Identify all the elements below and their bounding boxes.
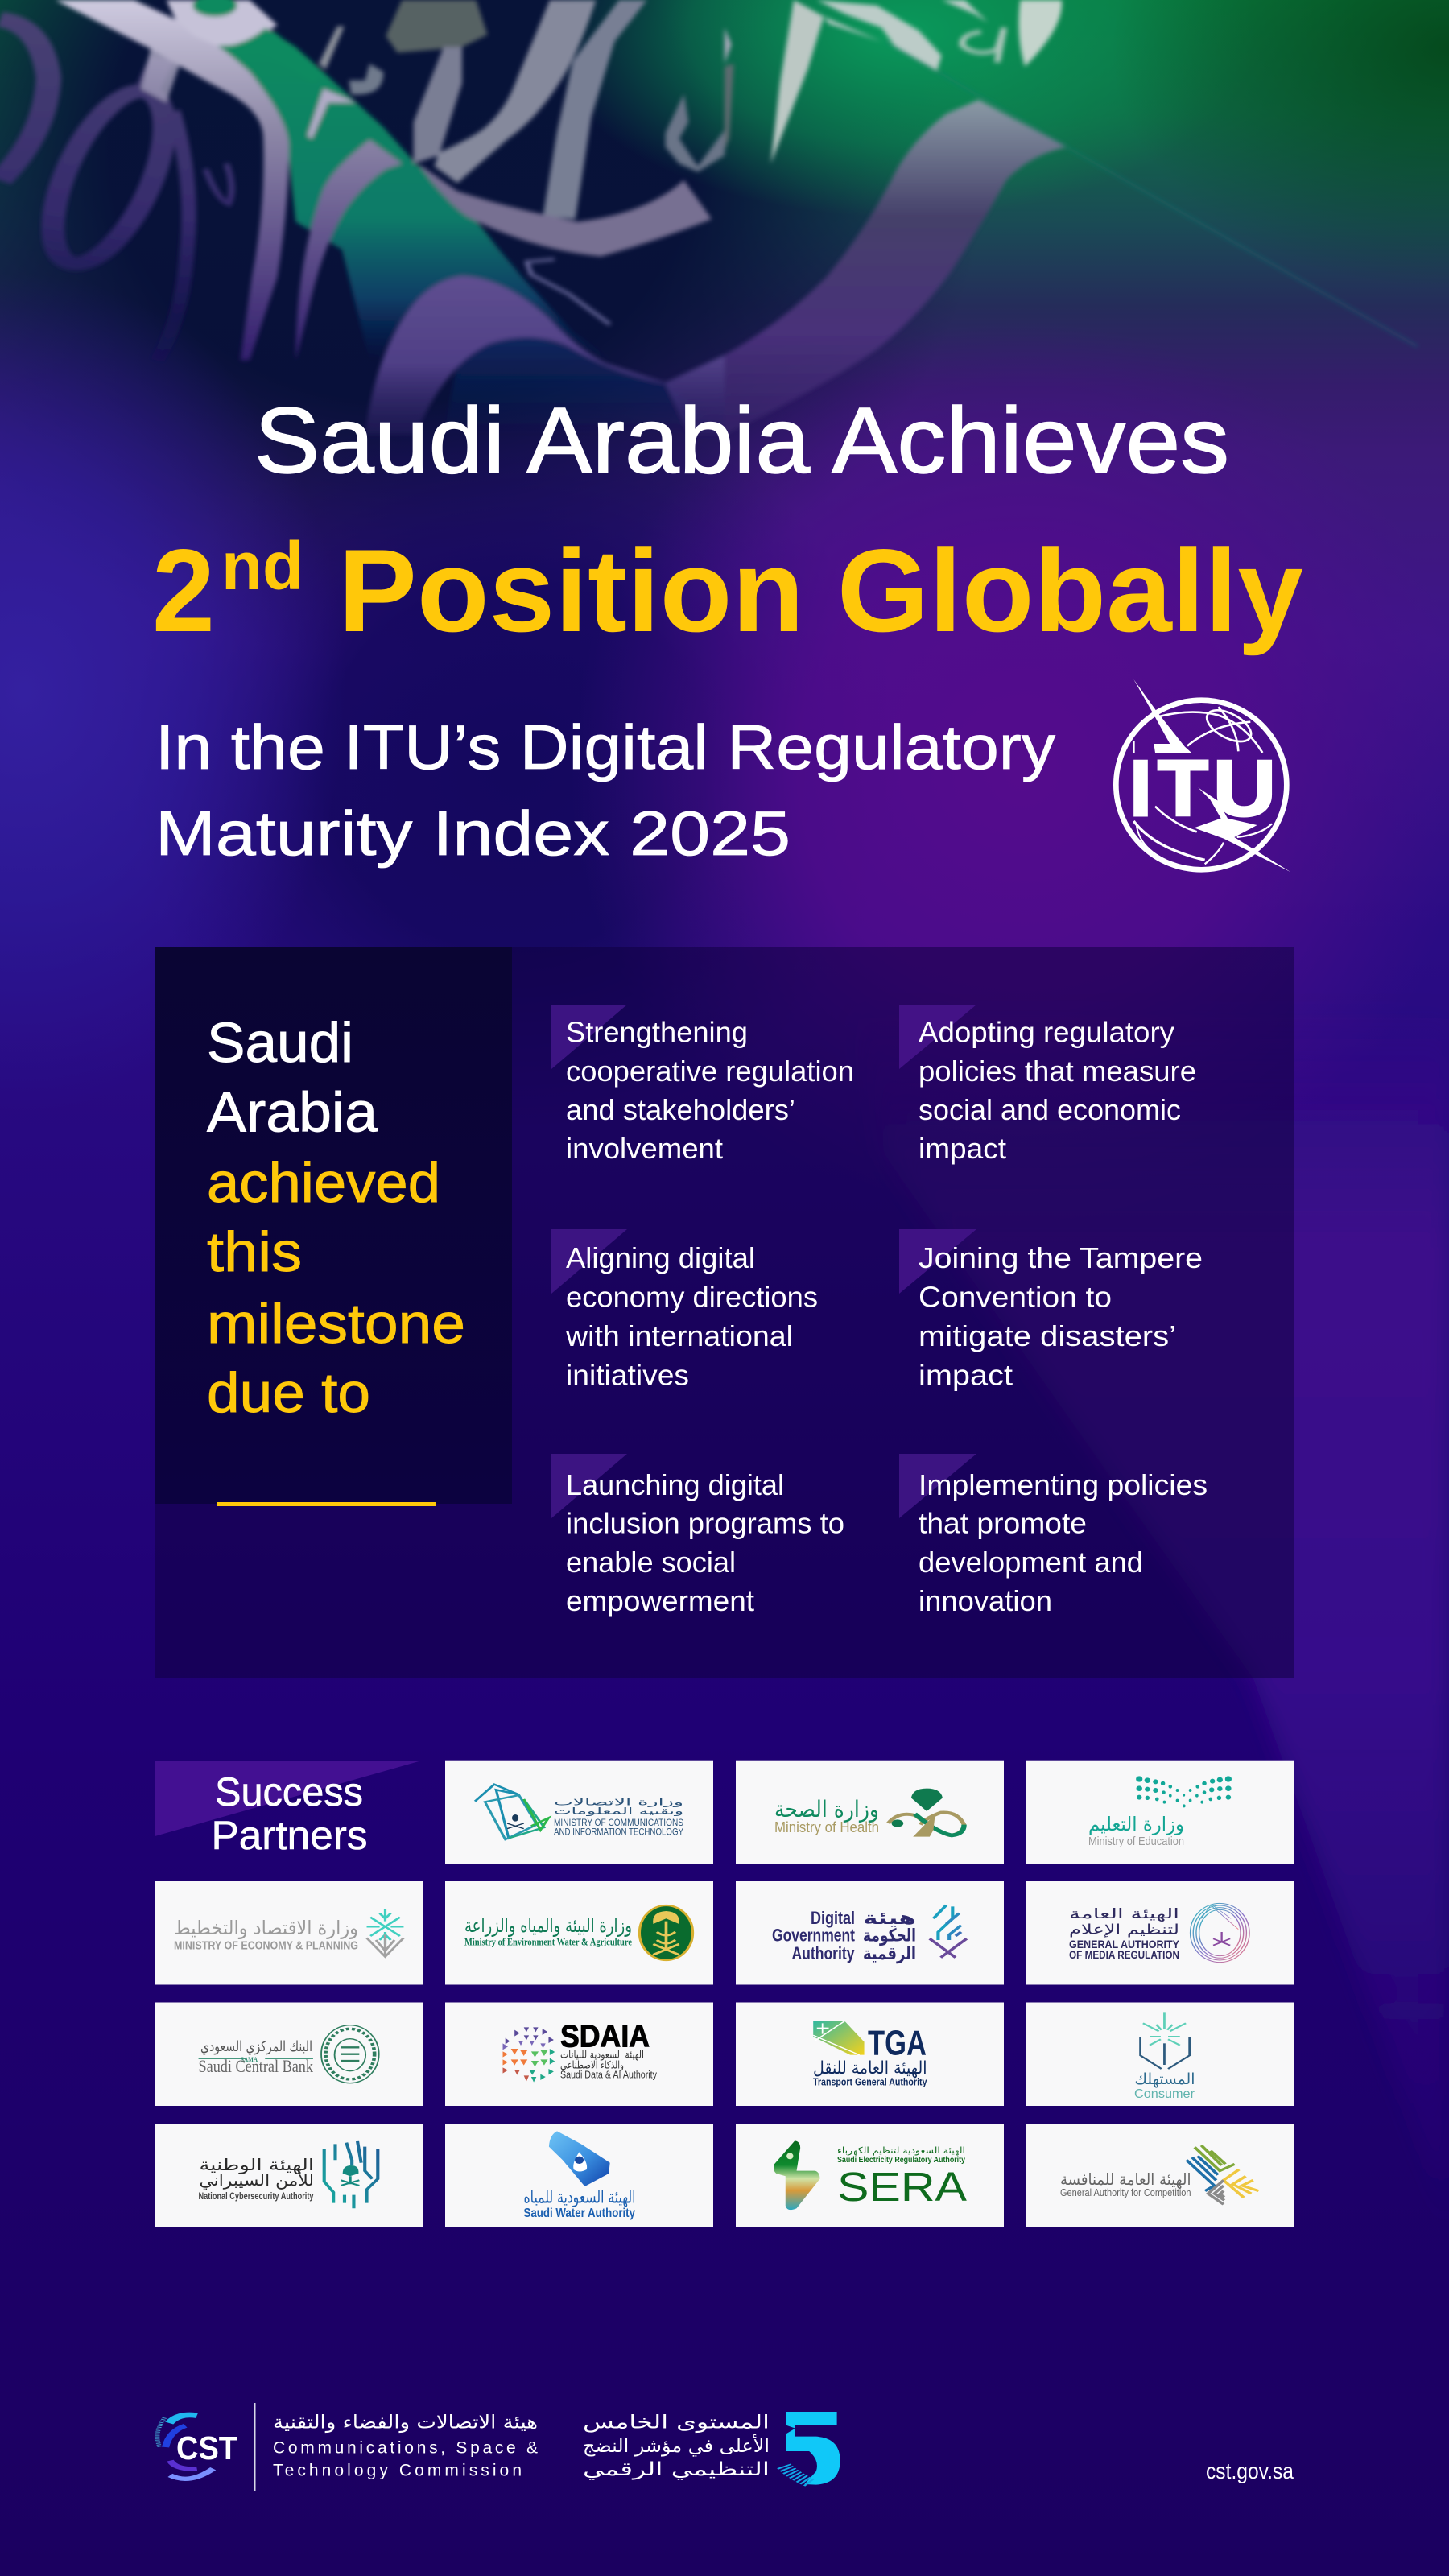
card: Digital Government Authority [736,1881,1004,1985]
card: Digital Government Authority: Authority [792,1943,855,1963]
card: General Authority of Media Regulation: لتنظيم الإعلام [1069,1922,1179,1938]
card: Saudi Water Authority [445,2124,713,2227]
item: joining the Tampere Convention: mitigate disasters’ [919,1319,1176,1352]
card: Ministry of Environment Water and Agriculture: Ministry of Environment Water & Agriculture [464,1935,632,1948]
card: Ministry of Environment Water and Agriculture: وزارة البيئة والمياه والزراعة [464,1914,632,1937]
item: aligning digital economy [551,1229,818,1391]
card: Ministry of Education: Ministry of Education [1088,1835,1184,1848]
card: Saudi Water Authority: الهيئة السعودية للمياه [523,2188,636,2207]
item: implementing policies: that promote [919,1507,1087,1539]
heading: achieved this milestone due to: due to [207,1361,370,1424]
card: Saudi Central Bank [155,2003,423,2106]
card: SDAIA: Saudi Data & AI Authority [560,2069,657,2080]
card: SDAIA [445,2003,713,2106]
card: SDAIA: والذكاء الاصطناعي [560,2059,624,2072]
item: joining the Tampere Convention: impact [919,1359,1013,1391]
CST name text: هيئة الاتصالات والفضاء والتقنية [273,2412,538,2433]
card: Saudi Central Bank: SAMA [241,2056,258,2063]
card: General Authority for Competition [1026,2124,1294,2227]
item: adopting regulatory policies: Adopting regulatory [919,1016,1174,1048]
item: implementing policies: Implementing policies [919,1468,1208,1501]
heading: Saudi Arabia: Saudi [207,1011,353,1074]
panel: reasons [155,947,1294,1678]
icon: ITU logo: U [1213,744,1276,832]
item: strengthening cooperative regulation [551,1005,854,1165]
card: Transport General Authority: Transport General Authority [813,2075,927,2088]
card: General Authority of Media Regulation: الهيئة العامة [1069,1906,1179,1922]
icon: ITU logo [1116,679,1290,872]
item: adopting regulatory policies: social and economic [919,1093,1181,1126]
subtitle: Maturity Index 2025 [155,798,791,869]
card: Saudi Water Authority: Saudi Water Authority [523,2207,635,2220]
title line 2: 2nd position globally: nd [221,528,303,604]
card: Digital Government Authority: Government [772,1926,856,1945]
heading: achieved this milestone due to: milestone [207,1292,465,1355]
item: joining the Tampere Convention [899,1229,1203,1391]
item: aligning digital economy: economy directions [566,1280,818,1314]
item: adopting regulatory policies: impact [919,1132,1006,1165]
item: adopting regulatory policies [899,1005,1196,1165]
card: Ministry of Health: Ministry of Health [774,1819,879,1835]
icon: ITU logo: I [1129,744,1152,832]
card: Saudi Electricity Regulatory Authority: SERA [837,2164,967,2210]
card: Ministry of Communications and Information Technology [445,1761,713,1864]
item: aligning digital economy: initiatives [566,1359,689,1391]
gold underline [217,1502,436,1506]
heading: Success Partners [155,1761,422,1858]
card: General Authority of Media Regulation [1026,1881,1294,1985]
fifth level text: الأعلى في مؤشر النضج [583,2434,770,2457]
title line 1: Saudi Arabia Achieves [254,388,1229,493]
card: Transport General Authority [736,2003,1004,2106]
heading: achieved this milestone due to: achieved [207,1151,440,1214]
card: Digital Government Authority: Digital [811,1908,855,1928]
footer [157,2403,1294,2491]
card: Saudi Electricity Regulatory Authority: Saudi Electricity Regulatory Authority [837,2155,965,2165]
card: National Cybersecurity Authority: للأمن السيبراني [200,2170,314,2190]
heading: Success Partners: Partners [211,1813,367,1858]
card: Digital Government Authority: الرقمية [863,1944,916,1964]
card: Digital Government Authority: الحكومة [863,1926,916,1946]
item: joining the Tampere Convention: Convention to [919,1280,1112,1314]
item: implementing policies: innovation [919,1584,1052,1617]
CST name text [273,2412,538,2479]
heading: achieved this milestone due to [207,1151,465,1424]
card: National Cybersecurity Authority: الهيئة الوطنية [200,2155,314,2174]
card: Consumer: Consumer [1134,2087,1195,2101]
card: General Authority of Media Regulation: OF MEDIA REGULATION [1069,1948,1179,1961]
card: Ministry of Communications and Information Technology: وزارة الاتصالات [554,1797,683,1808]
item: strengthening cooperative regulation: cooperative regulation [566,1055,854,1088]
title line 2: 2nd position globally: Position Globally [338,525,1303,656]
icon: CST logo [157,2415,237,2479]
card: Ministry of Communications and Information Technology: وتقنية المعلومات [554,1806,683,1816]
item: launching digital inclusion: Launching digital [566,1468,784,1501]
title [152,388,1303,869]
card: Consumer: المستهلك [1135,2070,1195,2088]
item: launching digital inclusion [551,1454,844,1617]
card: Ministry of Communications and Information Technology: AND INFORMATION TECHNOLOGY [554,1826,683,1837]
card: Ministry of Education [1026,1761,1294,1864]
subtitle [155,712,1055,869]
card: Saudi Electricity Regulatory Authority [736,2124,1004,2227]
card: Ministry of Communications and Information Technology: MINISTRY OF COMMUNICATIONS [554,1817,683,1828]
card: Ministry of Health [736,1761,1004,1864]
heading: Success Partners: Success [215,1769,363,1814]
card: Saudi Electricity Regulatory Authority: الهيئة السعودية لتنظيم الكهرباء [837,2145,965,2156]
card: Ministry of Education: وزارة التعليم [1088,1813,1184,1835]
fifth level text [583,2412,770,2480]
item: launching digital inclusion: enable social [566,1546,736,1579]
card: SDAIA: الهيئة السعودية للبيانات [560,2050,644,2061]
card: General Authority for Competition: General Authority for Competition [1060,2186,1191,2198]
item: implementing policies [899,1454,1208,1617]
card: SDAIA: SDAIA [560,2019,650,2054]
flag artwork [0,0,1418,435]
item: strengthening cooperative regulation: involvement [566,1132,723,1165]
card: Transport General Authority: الهيئة العامة للنقل [813,2058,927,2079]
subtitle: In the ITU’s Digital Regulatory [155,712,1055,782]
fifth level text: المستوى الخامس [583,2412,770,2433]
icon: CST logo: CST [176,2429,237,2467]
card: Ministry of Environment Water and Agriculture [445,1881,713,1985]
card: Transport General Authority: TGA [868,2024,927,2062]
card: Ministry of Health: وزارة الصحة [774,1796,879,1823]
item: implementing policies: development and [919,1546,1143,1579]
CST name text: Technology Commission [273,2462,522,2479]
panel: left heading block [155,947,512,1506]
card: General Authority of Media Regulation: GENERAL AUTHORITY [1069,1938,1180,1951]
CST name text: Communications, Space & [273,2439,538,2457]
heading: achieved this milestone due to: this [207,1220,302,1283]
item: strengthening cooperative regulation: and stakeholders’ [566,1093,795,1126]
icon: ITU logo: T [1158,744,1208,832]
card: Ministry of Economy and Planning: وزارة الاقتصاد والتخطيط [174,1917,358,1939]
card: Ministry of Economy and Planning: MINISTRY OF ECONOMY & PLANNING [174,1938,358,1953]
card: Consumer [1026,2003,1294,2106]
website: cst.gov.sa [1206,2458,1294,2483]
fifth level text: التنظيمي الرقمي [583,2459,770,2480]
card: Saudi Central Bank: Saudi Central Bank [198,2056,313,2076]
item: strengthening cooperative regulation: Strengthening [566,1016,748,1048]
heading: Saudi Arabia: Arabia [207,1080,378,1143]
card: National Cybersecurity Authority [155,2124,423,2227]
item: joining the Tampere Convention: Joining the Tampere [919,1241,1203,1274]
item: adopting regulatory policies: policies that measure [919,1055,1196,1088]
item: launching digital inclusion: inclusion programs to [566,1507,844,1539]
item: launching digital inclusion: empowerment [566,1584,754,1617]
panel: success partners [155,1761,1294,2227]
card: General Authority for Competition: الهيئة العامة للمنافسة [1060,2169,1191,2189]
title line 2: 2nd position globally: 2 [152,525,215,656]
item: aligning digital economy: Aligning digital [566,1241,755,1274]
item: aligning digital economy: with international [565,1319,793,1352]
card: Digital Government Authority: هيئة [863,1909,916,1929]
heading: Saudi Arabia [207,1011,378,1143]
icon: number 5 [784,2412,840,2485]
card: Saudi Central Bank: البنك المركزي السعودي [200,2038,312,2055]
card: National Cybersecurity Authority: National Cybersecurity Authority [198,2190,314,2202]
card: Ministry of Economy and Planning [155,1881,423,1985]
